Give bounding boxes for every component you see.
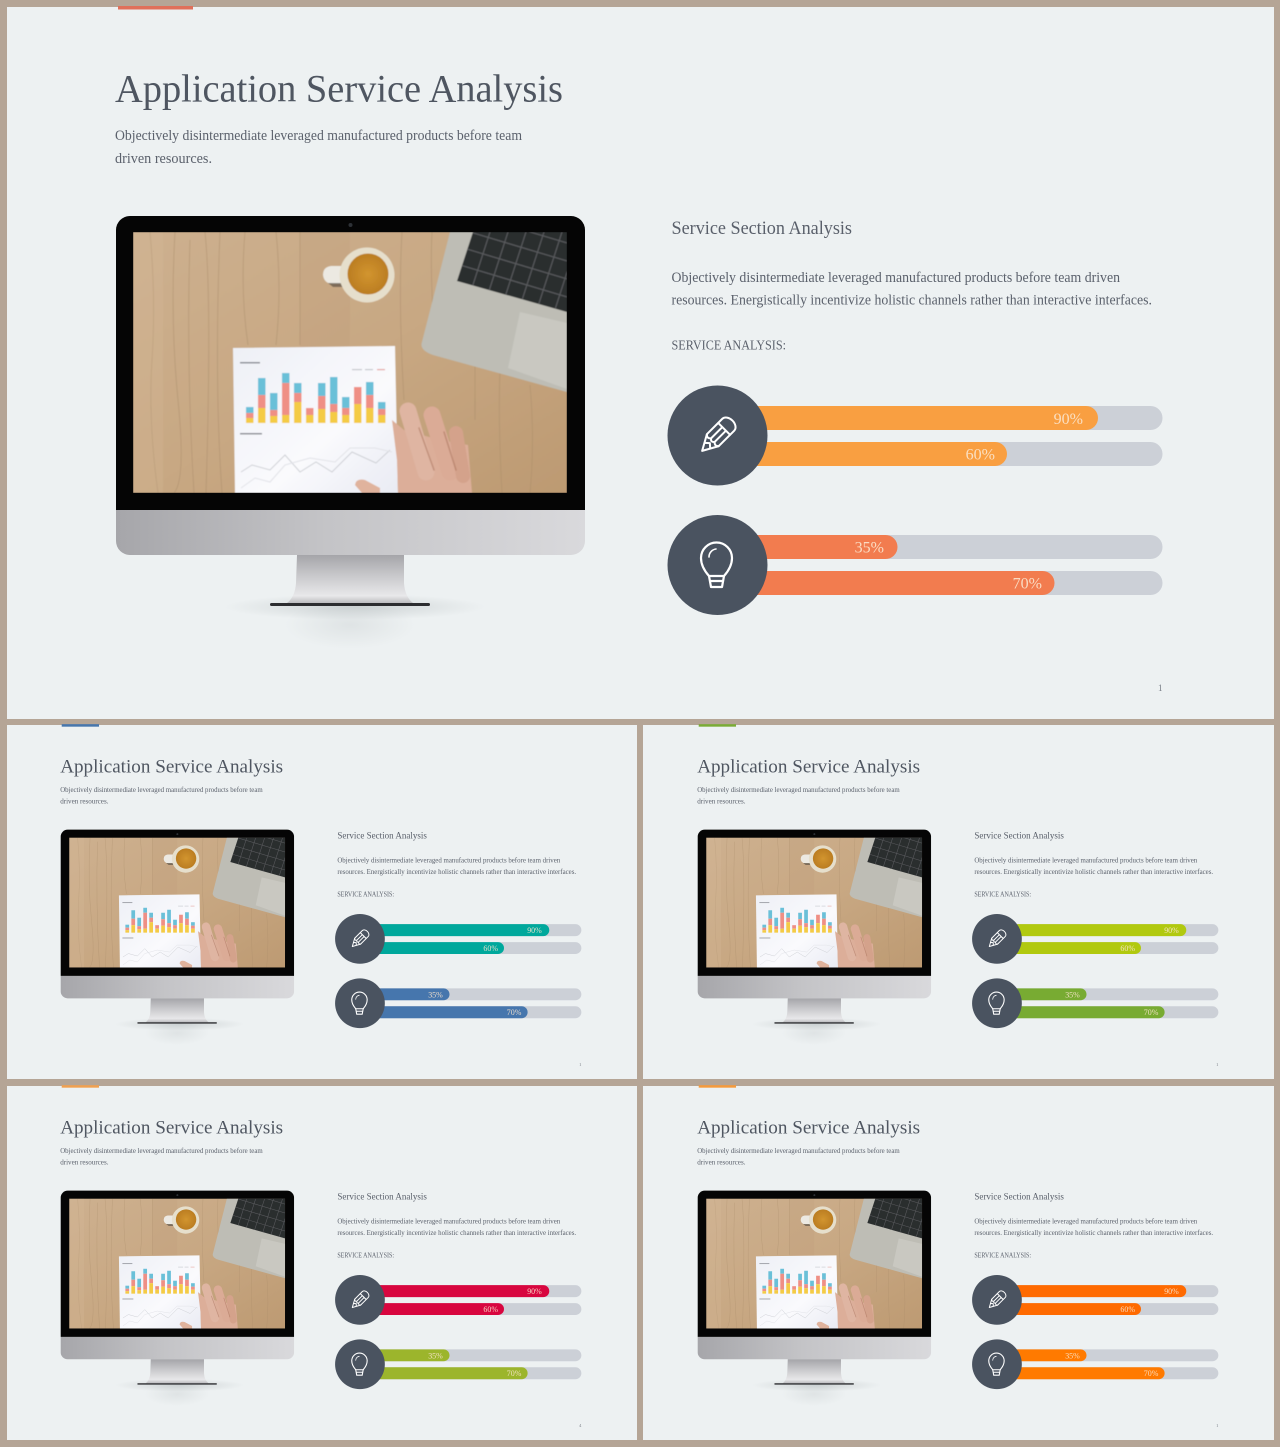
section paragraph: [974, 1217, 1213, 1237]
section paragraph: [974, 856, 1213, 876]
progress group: bulb: 70%: [1013, 576, 1042, 592]
section paragraph: resources. Energistically incentivize holistic channels rather than interactive interfaces.: [974, 868, 1213, 876]
progress group: bulb: 35%: [1065, 1351, 1080, 1360]
subtitle: Objectively disintermediate leveraged manufactured products before team: [60, 1147, 263, 1155]
subtitle: Objectively disintermediate leveraged manufactured products before team: [115, 128, 523, 144]
section heading: Service Section Analysis: [337, 1192, 427, 1202]
progress group: pencil: [668, 386, 1162, 486]
progress group: bulb: 35%: [1065, 990, 1080, 999]
progress group: pencil: 60%: [483, 944, 498, 953]
page number: 1: [1216, 1423, 1218, 1428]
section heading: Service Section Analysis: [337, 831, 427, 841]
progress group: pencil: 90%: [1054, 411, 1083, 428]
section heading: Service Section Analysis: [672, 219, 852, 239]
monitor with desk photo: [116, 208, 598, 649]
progress group: bulb: 70%: [1144, 1008, 1159, 1017]
section paragraph: Objectively disintermediate leveraged manufactured products before team driven: [672, 270, 1121, 286]
panel: lime and green variant: [643, 724, 1274, 1079]
progress group: pencil: 90%: [527, 926, 542, 935]
subtitle: driven resources.: [697, 797, 746, 805]
progress group: bulb: [668, 515, 1162, 615]
accent tab: [62, 1085, 99, 1088]
subtitle: [697, 786, 900, 805]
section paragraph: Objectively disintermediate leveraged manufactured products before team driven: [974, 1217, 1198, 1225]
accent tab: [62, 724, 99, 727]
page number: 1: [579, 1062, 581, 1067]
page number: 1: [1158, 683, 1162, 693]
panel: teal and blue variant: [7, 724, 637, 1079]
subtitle: Objectively disintermediate leveraged manufactured products before team: [60, 786, 263, 794]
progress group: pencil: 90%: [1164, 926, 1179, 935]
progress group: bulb: [335, 1339, 581, 1389]
section paragraph: resources. Energistically incentivize holistic channels rather than interactive interfaces.: [337, 868, 576, 876]
progress group: pencil: 60%: [966, 446, 995, 464]
monitor with desk photo: [698, 1187, 938, 1406]
section paragraph: [337, 1217, 576, 1237]
subtitle: Objectively disintermediate leveraged manufactured products before team: [697, 1147, 900, 1155]
accent tab: [699, 1085, 736, 1088]
panel: crimson and olive variant: [7, 1085, 637, 1440]
progress group: bulb: 35%: [855, 540, 884, 556]
progress group: pencil: [972, 914, 1218, 964]
service analysis label: SERVICE ANALYSIS:: [974, 890, 1031, 898]
title: Application Service Analysis: [60, 757, 283, 778]
subtitle: driven resources.: [60, 1158, 109, 1166]
service analysis label: SERVICE ANALYSIS:: [974, 1251, 1031, 1259]
title: Application Service Analysis: [697, 1118, 920, 1139]
section heading: Service Section Analysis: [974, 831, 1064, 841]
title: Application Service Analysis: [115, 68, 563, 110]
progress group: pencil: 60%: [1120, 1305, 1135, 1314]
section heading: Service Section Analysis: [974, 1192, 1064, 1202]
subtitle: [60, 786, 263, 805]
title: Application Service Analysis: [60, 1118, 283, 1139]
progress group: bulb: 70%: [1144, 1369, 1159, 1378]
progress group: pencil: [335, 1275, 581, 1325]
subtitle: driven resources.: [697, 1158, 746, 1166]
service analysis label: SERVICE ANALYSIS:: [337, 1251, 394, 1259]
progress group: pencil: [972, 1275, 1218, 1325]
section paragraph: [337, 856, 576, 876]
subtitle: driven resources.: [115, 151, 212, 167]
progress group: bulb: 35%: [428, 1351, 443, 1360]
progress group: bulb: 70%: [507, 1369, 522, 1378]
subtitle: driven resources.: [60, 797, 109, 805]
progress group: bulb: [335, 978, 581, 1028]
section paragraph: [672, 270, 1152, 308]
service analysis label: SERVICE ANALYSIS:: [337, 890, 394, 898]
section paragraph: Objectively disintermediate leveraged manufactured products before team driven: [974, 856, 1198, 864]
progress group: pencil: 90%: [527, 1287, 542, 1296]
section paragraph: Objectively disintermediate leveraged manufactured products before team driven: [337, 856, 561, 864]
progress group: bulb: [972, 1339, 1218, 1389]
progress group: pencil: [335, 914, 581, 964]
panel: main slide: [7, 6, 1274, 719]
subtitle: [115, 128, 523, 167]
progress group: pencil: 90%: [1164, 1287, 1179, 1296]
accent tab: [699, 724, 736, 727]
panel: orange variant: [643, 1085, 1274, 1440]
monitor with desk photo: [61, 1187, 301, 1406]
section paragraph: resources. Energistically incentivize holistic channels rather than interactive interfaces.: [337, 1229, 576, 1237]
subtitle: [697, 1147, 900, 1166]
progress group: pencil: 60%: [483, 1305, 498, 1314]
progress group: bulb: 35%: [428, 990, 443, 999]
monitor with desk photo: [61, 826, 301, 1045]
subtitle: [60, 1147, 263, 1166]
progress group: pencil: 60%: [1120, 944, 1135, 953]
section paragraph: resources. Energistically incentivize holistic channels rather than interactive interfaces.: [974, 1229, 1213, 1237]
section paragraph: resources. Energistically incentivize holistic channels rather than interactive interfaces.: [672, 292, 1152, 308]
monitor with desk photo: [698, 826, 938, 1045]
progress group: bulb: 70%: [507, 1008, 522, 1017]
section paragraph: Objectively disintermediate leveraged manufactured products before team driven: [337, 1217, 561, 1225]
accent tab: [118, 6, 193, 10]
subtitle: Objectively disintermediate leveraged manufactured products before team: [697, 786, 900, 794]
page number: 4: [579, 1423, 582, 1428]
progress group: bulb: [972, 978, 1218, 1028]
title: Application Service Analysis: [697, 757, 920, 778]
page number: 1: [1216, 1062, 1218, 1067]
service analysis label: SERVICE ANALYSIS:: [672, 338, 786, 354]
